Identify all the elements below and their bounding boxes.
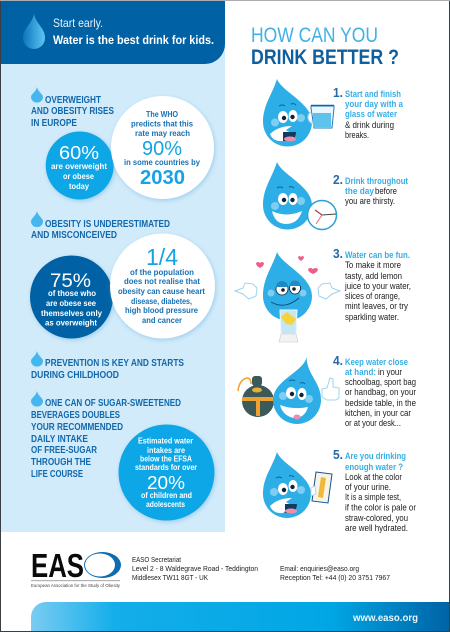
circle: 20 percent of children: 20% [147,473,185,493]
circle: 60 percent [46,132,114,200]
circle: one quarter of the population: does not realise that [124,276,200,286]
illustration: drop with urine colour chart [263,452,332,518]
logo: EASO [31,547,121,588]
title: how can you drink better: DRINK BETTER ? [251,46,399,69]
heading: prevention is key: DURING CHILDHOOD [31,370,119,381]
tip 2 text: you are thirsty. [345,196,395,206]
circle: WHO prediction 90 percent by 2030: The WHO [146,109,178,119]
tip 4 text: Keep water close [345,357,408,367]
tip 2 text: Drink throughout [345,176,408,186]
tip 5: are you drinking enough water [263,448,416,533]
tip 4 text: in your [378,367,402,377]
header text: start early: Start early. [53,16,103,30]
tip 1 text: Start and finish [345,89,401,99]
tip 4 text: or at your desk... [345,418,401,428]
circle: 20 percent of children [118,424,214,520]
heading: one can of sugar-sweetened beverages: ONE CAN OF SUGAR-SWEETENED [45,398,181,409]
circle: 75 percent: as overweight [45,318,97,328]
tip 3 text: sparkling water. [345,312,399,322]
step number 2: 2. [333,173,343,187]
tip 5 text: It is a simple test, [345,492,401,502]
footer: address: Level 2 - 8 Waldegrave Road - Teddington [132,564,258,573]
heading: one can of sugar-sweetened beverages: OF FREE-SUGAR [31,445,98,456]
footer: address: Middlesex TW11 8GT - UK [132,573,208,582]
tip 3 text [344,250,411,322]
tip 2: drink throughout the day [263,162,408,230]
circle: one quarter of the population: and cancer [142,315,183,325]
circle: WHO prediction 90 percent by 2030: 2030 [140,167,185,189]
illustration: happy drop with lemon water and hearts [235,252,340,342]
circle: 60 percent: or obese [63,172,94,181]
circle: 75 percent [30,256,113,338]
circle: 20 percent of children: of children and [141,491,192,500]
illustration: drop with glass of water [263,79,334,146]
panel: header banner [0,0,225,64]
panel: left facts background [0,0,225,532]
tip 4 text [345,357,416,428]
tip 3: water can be fun [235,247,411,342]
tip 5 text: if the color is pale or [345,502,416,512]
footer: contact: Email: enquiries@easo.org [280,564,359,573]
heading: overweight and obesity rises [31,95,114,129]
section: overweight and obesity [31,87,214,200]
illustration: drop with clock [263,162,336,230]
logo: EASO: European Association for the Study of Obesity [31,583,121,588]
heading: prevention is key [31,358,184,381]
heading: prevention is key: PREVENTION IS KEY AND STARTS [45,358,184,369]
circle: one quarter of the population: 1/4 [146,244,178,270]
circle: 60 percent: 60% [59,143,99,163]
circle: one quarter of the population [110,234,215,338]
tip 5 text: are well hydrated. [345,523,408,533]
circle: WHO prediction 90 percent by 2030 [111,96,214,199]
tip 3 text: juice to your water, [344,281,411,291]
circle: WHO prediction 90 percent by 2030: rate may reach [135,128,190,138]
circle: WHO prediction 90 percent by 2030: predicts that this [131,118,193,128]
icon: small drop [31,351,43,367]
footer bar: website [31,602,449,631]
tip 1 text: & drink during [345,120,394,130]
circle: 20 percent of children: standards for over [135,463,198,472]
circle: 60 percent: today [69,182,89,191]
header text: water is the best drink: Water is the best drink for kids. [53,33,214,47]
circle: 60 percent: are overweight [51,162,107,171]
heading: obesity is underestimated [31,219,170,241]
circle: 20 percent of children: below the EFSA [140,454,192,464]
tip 3 text: To make it more [345,260,401,270]
tip 3 text: slices of orange, [345,291,400,301]
circle: one quarter of the population: obesity can cause heart [118,286,205,296]
heading: one can of sugar-sweetened beverages: LIFE COURSE [31,469,83,480]
tip 3 text: mint leaves, or try [345,301,409,311]
section: prevention [31,351,184,381]
icon: small drop [31,391,43,407]
footer: contact [280,564,390,582]
title: how can you drink better [251,24,399,69]
tip 2 text [345,176,408,206]
logo: EASO: EAS [31,547,84,584]
circle: 75 percent: are obese see [46,299,96,308]
tip 5 text: enough water ? [345,462,403,472]
tip 5 text [345,451,416,533]
footer bar: website: www.easo.org [352,612,418,624]
tip 1 text: glass of water [345,109,398,119]
circle: WHO prediction 90 percent by 2030: 90% [142,138,182,160]
heading: one can of sugar-sweetened beverages: YOUR RECOMMENDED [31,422,123,433]
tip 2 text: before [375,186,397,196]
tip 1 text: breaks. [345,130,369,140]
tip 1: start and finish [263,79,403,146]
title: how can you drink better: HOW CAN YOU [251,24,378,47]
footer: address: EASO Secretariat [132,555,181,564]
heading: one can of sugar-sweetened beverages: DAILY INTAKE [31,434,88,445]
tip 3 text: Water can be fun. [345,250,410,260]
tip 4: keep water close at hand [238,354,416,428]
circle: 75 percent: of those who [48,289,96,298]
tip 4 text: or handbag, on your [345,387,416,397]
heading: one can of sugar-sweetened beverages: THROUGH THE [31,457,91,468]
heading: overweight and obesity rises: IN EUROPE [31,118,77,129]
tip 4 text: at hand: [345,367,376,377]
heading: one can of sugar-sweetened beverages [31,398,181,480]
step number 3: 3. [333,247,343,261]
tip 4 text: kitchen, in your car [345,408,411,418]
circle: 20 percent of children: intakes are [147,446,185,455]
tip 4 text: schoolbag, sport bag [345,377,416,387]
tip 1 text: your day with a [345,99,403,109]
heading: obesity is underestimated: OBESITY IS UNDERESTIMATED [45,219,170,230]
tip 5 text: Look at the color [345,472,402,482]
icon: small drop [31,87,43,103]
icon: small drop [31,211,43,227]
circle: 20 percent of children: Estimated water [138,436,194,446]
circle: one quarter of the population: high blood pressure [125,305,198,315]
icon: header water drop [23,14,45,49]
footer: contact: Reception Tel: +44 (0) 20 3751 7967 [280,573,390,582]
heading: overweight and obesity rises: OVERWEIGHT [45,95,101,106]
tip 1 text [345,89,403,140]
heading: one can of sugar-sweetened beverages: BEVERAGES DOUBLES [31,410,120,421]
illustration: drop with canteen and thumb up [238,357,339,424]
section: obesity underestimated [30,211,215,338]
circle: 20 percent of children: adolescents [146,500,185,509]
heading: overweight and obesity rises: AND OBESITY RISES [31,106,114,117]
circle: one quarter of the population: disease, diabetes, [131,296,192,306]
step number 5: 5. [333,448,343,462]
tip 5 text: straw-colored, you [345,513,408,523]
tip 3 text: tasty, add lemon [345,271,402,281]
tip 2 text: the day [345,186,374,196]
tip 5 text: Are you drinking [345,451,406,461]
heading: obesity is underestimated: AND MISCONCEIVED [31,230,117,241]
step number 4: 4. [333,354,343,368]
tip 4 text: bedside table, in the [345,398,416,408]
step number 1: 1. [333,86,343,100]
footer: address [132,555,258,582]
section: sugar-sweetened beverages [31,391,214,520]
tip 5 text: of your urine. [345,482,391,492]
circle: 75 percent: 75% [50,271,91,292]
circle: WHO prediction 90 percent by 2030: in some countries by [124,157,200,167]
circle: 75 percent: themselves only [41,309,102,318]
circle: one quarter of the population: of the population [130,267,194,277]
